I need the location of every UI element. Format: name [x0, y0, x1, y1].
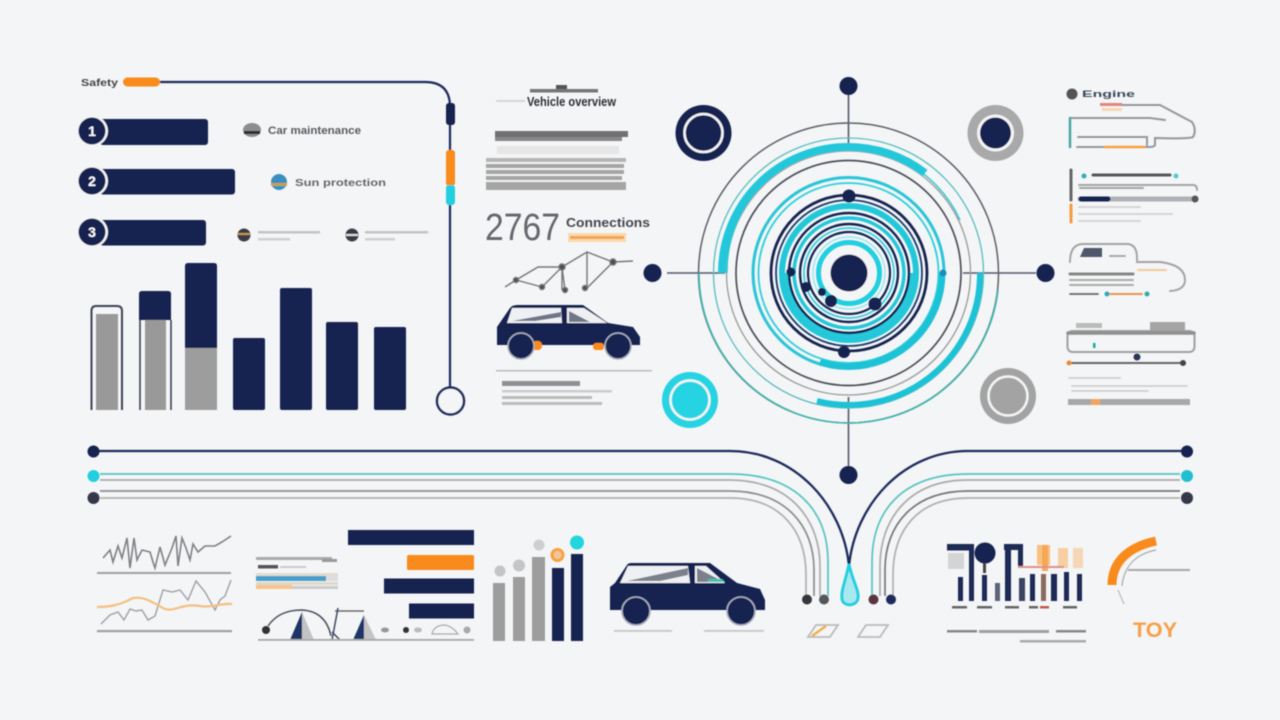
ranked bar 1: 1 [88, 123, 96, 139]
corner dial: navy [676, 105, 732, 161]
ring nodes [786, 190, 946, 358]
legend item 2 [271, 174, 386, 190]
panel: left rankings and bars [78, 78, 464, 414]
panel: right column of outlined diagrams [1066, 88, 1198, 405]
orange arc gauge [1112, 541, 1190, 604]
diagram 1 [1066, 88, 1195, 147]
big number: 2767 [485, 207, 560, 249]
line chart: bottom with orange trend [97, 580, 232, 632]
panel: converging line network [88, 446, 1193, 637]
text block: column caption [947, 630, 1086, 642]
legend item 1: Car maintenance [268, 125, 361, 137]
panel: concentric radial diagram [644, 77, 1054, 484]
column chart with markers [493, 536, 584, 641]
text block: summary [486, 131, 628, 190]
outer rings [698, 123, 998, 423]
legend item 2: Sun protection [295, 178, 386, 189]
text block: car caption [496, 370, 652, 405]
ranked bar 2 [78, 166, 235, 196]
orange column tops [1018, 545, 1083, 571]
diagram 3 [1070, 244, 1185, 296]
axis lines and satellite dots [644, 77, 1054, 484]
panel: bottom charts [97, 530, 765, 641]
text block: number caption [566, 215, 650, 242]
icon: car [497, 305, 640, 359]
corner dial: cyan [662, 372, 718, 428]
end dots [88, 446, 1193, 604]
diagram 1: Engine [1082, 89, 1135, 99]
legend item 1 [243, 123, 361, 137]
network diagram [505, 252, 633, 292]
grey and cyan left lines [100, 474, 828, 596]
connector line with pills [123, 78, 464, 414]
column tick labels [952, 606, 1077, 608]
icon: car large [610, 563, 765, 632]
panel: bottom right tool columns [947, 541, 1190, 642]
horizontal bar chart [348, 530, 474, 618]
ranked bar 2: 2 [88, 173, 96, 189]
ranked bar 3 [78, 217, 206, 247]
icon: cyan drop [842, 564, 858, 605]
navy columns [958, 572, 1082, 601]
column tops [947, 542, 1023, 601]
diagram 4 [1066, 322, 1194, 405]
orange label: TOY [1133, 619, 1177, 642]
corner dial: grey and navy [968, 105, 1024, 161]
legend item 3 [238, 228, 320, 242]
corner dial: grey [980, 368, 1036, 424]
text block: heading [496, 85, 617, 109]
grey and cyan right lines [872, 474, 1180, 596]
ranked bar 3: 3 [88, 224, 96, 240]
text block: heading: Vehicle overview [527, 94, 617, 109]
text block: number caption: Connections [566, 215, 650, 230]
line chart: top [97, 536, 231, 574]
middle cyan rings [753, 178, 944, 368]
diagram 2 [1071, 170, 1198, 222]
ranked bar 1 [78, 116, 208, 146]
legend item 4 [346, 228, 428, 242]
heading label: Safety [81, 78, 119, 89]
navy converging lines [93, 451, 1187, 566]
bar chart [92, 263, 406, 410]
small tags [808, 625, 888, 637]
panel: middle column [485, 85, 652, 405]
inner navy and cyan rings [771, 195, 927, 351]
gauges and small icons [258, 608, 474, 641]
mini table [256, 557, 338, 589]
